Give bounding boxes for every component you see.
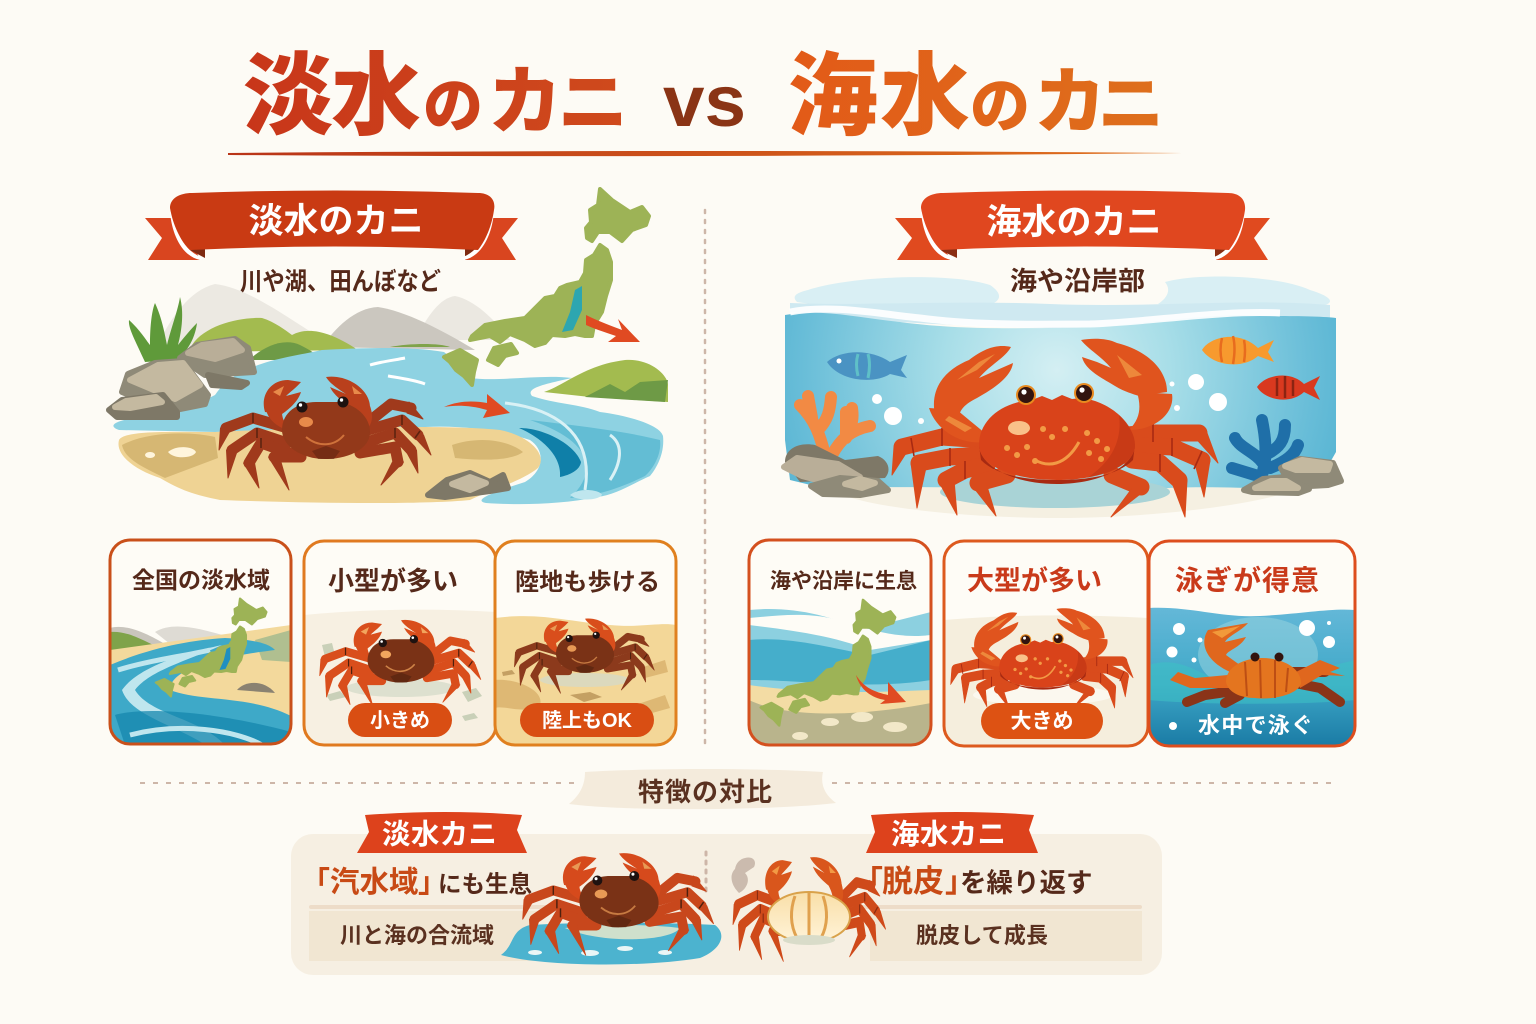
water swirl — [370, 358, 619, 500]
fact: brackish water: にも生息 — [438, 870, 532, 897]
rocks right — [1244, 459, 1341, 493]
card title: 大型が多い — [967, 565, 1102, 596]
pill — [520, 703, 654, 737]
river water — [113, 348, 663, 504]
location text: freshwater: 川や湖、田んぼなど — [240, 268, 441, 296]
swimming crab — [1170, 623, 1345, 703]
sea floor — [830, 485, 1300, 518]
pill — [348, 703, 452, 737]
section divider: comparison — [140, 769, 1335, 809]
title: vs: vs — [663, 62, 746, 142]
card title: 陸地も歩ける — [515, 569, 660, 596]
bubbles — [872, 374, 1227, 425]
red fish — [1257, 376, 1320, 400]
title: saltwater crab: 海 — [788, 47, 878, 147]
water caption: 水中で泳ぐ — [1198, 713, 1313, 738]
bubbles — [1166, 620, 1335, 730]
section heading: 特徴の対比 — [638, 777, 772, 807]
panel: freshwater scene — [109, 189, 668, 504]
crab: brackish — [523, 853, 714, 955]
rocks left — [784, 444, 889, 495]
detail: growth: 脱皮して成長 — [916, 923, 1048, 948]
card: large size — [944, 541, 1148, 746]
card: nationwide freshwater — [110, 540, 291, 745]
pill text: 小きめ — [370, 709, 430, 732]
title: freshwater crab: 淡 — [243, 47, 333, 147]
sand beach — [118, 427, 541, 503]
small island — [544, 360, 668, 402]
fact: brackish water: 」 — [418, 867, 447, 899]
sand patches — [122, 433, 523, 478]
coral orange — [800, 396, 870, 455]
mountains — [157, 284, 510, 350]
title: saltwater crab: カ — [1034, 63, 1106, 143]
label: freshwater crab — [357, 812, 527, 853]
white wave — [790, 309, 1280, 324]
map — [761, 600, 895, 725]
label: saltwater crab — [866, 812, 1038, 853]
blue fish — [827, 352, 907, 380]
pill text: 大きめ — [1010, 710, 1074, 733]
card: good at swimming — [1149, 541, 1355, 746]
crab: molting — [733, 857, 886, 961]
fact: molting: 「 — [853, 866, 883, 899]
title: freshwater crab: の — [423, 73, 483, 140]
crab — [320, 620, 481, 706]
detail: confluence: 川と海の合流域 — [340, 923, 494, 948]
pill text: 陸上もOK — [542, 709, 633, 732]
text strips — [309, 905, 1142, 961]
card: small size — [304, 541, 496, 745]
card: lives on the coast — [749, 540, 931, 745]
crab — [514, 618, 654, 693]
japan map — [444, 189, 649, 385]
fact: molting: を繰り返す — [960, 868, 1092, 898]
title — [228, 47, 1182, 156]
banner: saltwater — [895, 190, 1270, 260]
orange fish — [1202, 336, 1274, 364]
fact: brackish water: 汽水域 — [330, 866, 419, 899]
crab — [219, 377, 431, 490]
label: saltwater crab: 海水カニ — [891, 819, 1006, 851]
center vertical divider — [704, 210, 706, 745]
title: freshwater crab: 水 — [331, 47, 421, 147]
puddle — [501, 923, 721, 964]
location text: sea: 海や沿岸部 — [1010, 266, 1145, 296]
title underline — [228, 151, 1182, 156]
panel: sea scene — [784, 276, 1341, 518]
molt shadow — [732, 858, 755, 893]
fact: brackish water: 「 — [301, 866, 330, 899]
crab shadow — [940, 476, 1170, 508]
banner text: 海水のカニ — [986, 203, 1162, 242]
panel: comparison — [291, 812, 1162, 975]
title: saltwater crab: 水 — [880, 47, 970, 147]
card title: 海や沿岸に生息 — [770, 569, 917, 593]
label: freshwater crab: 淡水カニ — [382, 819, 497, 851]
fact: molting: 」 — [945, 866, 975, 899]
banner text: 淡水のカニ — [248, 202, 424, 241]
arrow on water — [444, 394, 510, 418]
deeper right water — [530, 420, 660, 498]
arrow on map — [586, 315, 640, 342]
map — [156, 598, 266, 696]
crab — [951, 608, 1133, 708]
card title: 全国の淡水域 — [132, 567, 270, 593]
card title: 泳ぎが得意 — [1175, 564, 1319, 596]
card title: 小型が多い — [328, 566, 458, 596]
coral blue — [1232, 420, 1298, 475]
title: freshwater crab: カ — [488, 60, 562, 143]
title: freshwater crab: ニ — [558, 64, 628, 142]
surface clouds — [790, 276, 1330, 328]
green hills — [192, 318, 450, 360]
arrow — [856, 675, 906, 704]
banner: freshwater — [145, 190, 518, 260]
fact: molting: 脱皮 — [882, 864, 944, 899]
card: walks on land — [495, 541, 676, 745]
crab — [892, 339, 1218, 517]
rocks and grass — [109, 297, 508, 497]
center dots — [704, 852, 708, 895]
section banner — [569, 769, 836, 809]
title: saltwater crab: ニ — [1098, 67, 1164, 141]
pill — [981, 703, 1103, 739]
sea body — [785, 313, 1336, 497]
title: saltwater crab: の — [970, 73, 1030, 140]
